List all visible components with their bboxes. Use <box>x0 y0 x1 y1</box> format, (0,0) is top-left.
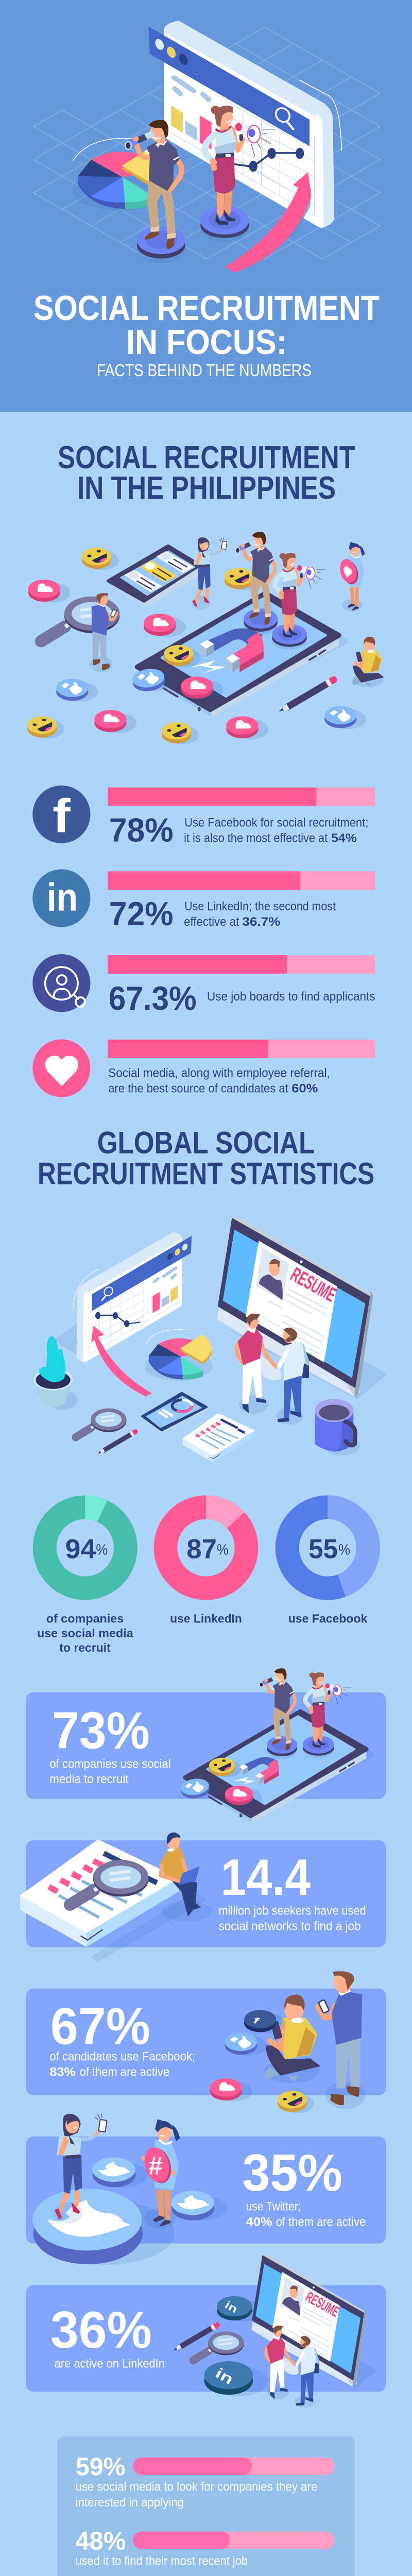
title <box>33 289 380 362</box>
heading: global statistics: GLOBAL SOCIAL <box>97 1125 315 1160</box>
stat row: social media and referral: are the best source of candidates at <box>108 1081 288 1095</box>
bar row: 48% most recent job: 48% <box>75 2527 126 2555</box>
card: 67% <box>26 1971 386 2113</box>
document <box>183 1413 255 1462</box>
stat row: Facebook: 78% <box>109 811 174 849</box>
donut: 87%: 87 <box>186 1534 217 1564</box>
card: 73%: media to recruit <box>49 1772 129 1786</box>
mug <box>315 1399 360 1456</box>
stat row: Facebook: 54% <box>331 832 357 845</box>
card: 73%: of companies use social <box>49 1757 171 1771</box>
card: 36%: 36% <box>50 2301 152 2359</box>
resume monitor <box>217 1216 388 1425</box>
card: 67%: 67% <box>50 1997 150 2055</box>
illustration: phone, magnet, people and reaction coins <box>27 532 384 744</box>
donut labels: to recruit <box>59 1641 111 1654</box>
card: 36%: RESUME <box>303 2289 342 2320</box>
pencil <box>98 1432 135 1453</box>
bar row: 48% most recent job: used it to find their most recent job <box>75 2554 248 2568</box>
bar row: 59% look for companies: 59% <box>76 2453 125 2481</box>
seated person with laptop <box>160 1833 212 1921</box>
card: 14.4: social networks to find a job <box>218 1919 361 1933</box>
heading: Philippines section: IN THE PHILIPPINES <box>77 470 336 506</box>
card: 35% <box>26 2114 386 2265</box>
donut labels <box>37 1612 368 1654</box>
stat row: LinkedIn: 36.7% <box>242 915 280 929</box>
resume monitor: RESUME <box>287 1263 340 1307</box>
illustration: resume, chart window, pie and desk items <box>33 1216 388 1597</box>
stat row: LinkedIn: Use LinkedIn; the second most <box>184 900 336 913</box>
bar row: 59% look for companies: use social media to look for companies they are <box>75 2480 317 2494</box>
chart window <box>73 1232 192 1363</box>
donut: 87%: % <box>217 1541 229 1558</box>
cards: global statistics part two <box>26 1971 386 2408</box>
plant <box>33 1336 77 1410</box>
bar row: 48% most recent job <box>75 2527 334 2568</box>
donut labels: use LinkedIn <box>170 1612 242 1625</box>
card: 35%: of them are active <box>276 2215 366 2229</box>
card: 35%: use Twitter; <box>246 2199 301 2213</box>
card: 14.4: 14.4 <box>221 1849 311 1906</box>
pie chart <box>145 1330 213 1381</box>
stat row: Facebook: Use Facebook for social recruitment; <box>184 816 368 830</box>
subtitle: FACTS BEHIND THE NUMBERS <box>97 361 312 380</box>
donut: 55% <box>287 1496 380 1597</box>
heading: global statistics <box>38 1125 374 1191</box>
stat row: social media and referral: Social media, along with employee referral, <box>108 1066 330 1080</box>
card: 67%: of candidates use Facebook; <box>49 2049 195 2063</box>
hashtag badge <box>141 2145 175 2186</box>
title: IN FOCUS: <box>126 323 287 362</box>
stat row: LinkedIn <box>32 869 375 933</box>
stat row: LinkedIn: in <box>47 875 78 919</box>
bar row: 59% look for companies <box>75 2453 334 2510</box>
card: 36%: are active on LinkedIn <box>55 2357 165 2370</box>
stat row: Facebook: it is also the most effective at <box>184 832 328 845</box>
card: 36% <box>26 2254 386 2408</box>
panel: job seeker behaviour bars <box>33 2436 379 2576</box>
heading: Philippines section: SOCIAL RECRUITMENT <box>58 440 355 476</box>
hero illustration <box>33 21 380 273</box>
stat row: job boards: 67.3% <box>109 979 197 1017</box>
card: 35%: 40% <box>246 2215 272 2229</box>
hashtag badge: # <box>148 2152 162 2180</box>
donut: 94%: 94 <box>65 1534 96 1564</box>
donut: 55%: 55 <box>308 1534 338 1564</box>
donut: 94%: % <box>96 1541 108 1558</box>
card: 35%: 35% <box>242 2144 342 2202</box>
panel: hero header <box>0 0 412 412</box>
stat row: Facebook: f <box>53 790 71 842</box>
card: 73% <box>26 1668 386 1822</box>
donut: 87% <box>165 1496 247 1588</box>
card: 67%: 83% <box>49 2065 76 2079</box>
donut labels: use social media <box>37 1626 134 1640</box>
donut: 94% <box>45 1496 126 1588</box>
bar row: 59% look for companies: interested in applying <box>75 2496 184 2510</box>
panel: Philippines statistics <box>32 785 375 1191</box>
card: 67%: of them are active <box>80 2065 169 2079</box>
stat row: Facebook <box>32 785 375 849</box>
stat row: LinkedIn: 72% <box>109 895 174 933</box>
stat row: social media and referral: 60% <box>291 1081 318 1095</box>
magnifier <box>76 1409 126 1437</box>
stat row: LinkedIn: effective at <box>184 915 239 929</box>
card: 14.4 <box>20 1833 386 1962</box>
stat row: social media and referral <box>32 1039 375 1097</box>
donut: 55%: % <box>338 1541 350 1558</box>
growth arrow <box>91 1326 152 1397</box>
donut labels: of companies <box>46 1612 124 1625</box>
card: 14.4: million job seekers have used <box>218 1904 366 1918</box>
stat row: job boards: Use job boards to find applicants <box>207 990 375 1004</box>
tablet <box>142 1393 209 1433</box>
cards: global statistics part one <box>20 1612 386 1962</box>
heading: Philippines section <box>58 440 355 506</box>
card: 73%: 73% <box>52 1702 150 1759</box>
stat row: job boards <box>32 954 375 1017</box>
donut labels: use Facebook <box>288 1612 368 1625</box>
